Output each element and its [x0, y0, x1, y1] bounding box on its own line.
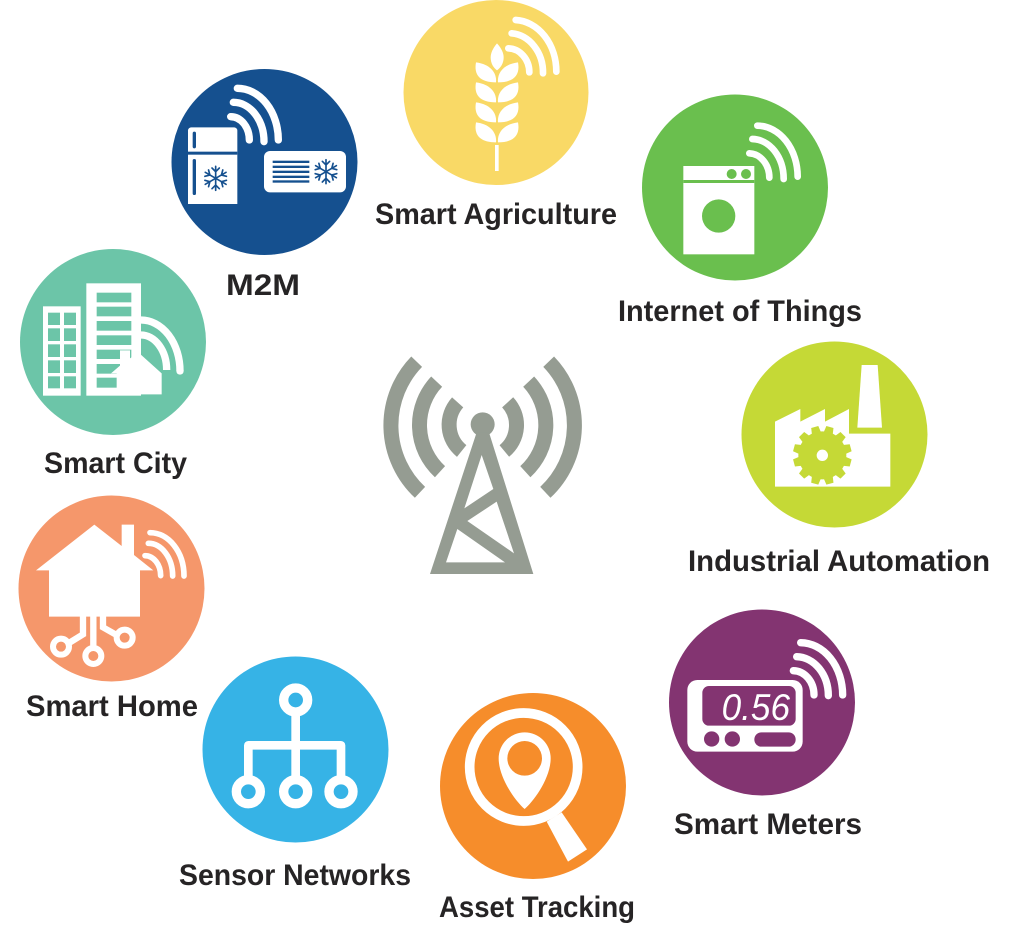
icon: central antenna tower	[391, 362, 574, 574]
panel: Smart Meters	[669, 610, 862, 841]
panel: Smart City	[20, 249, 206, 480]
panel: M2M	[172, 69, 358, 302]
icon: digital meter with wifi	[687, 643, 843, 752]
label: Industrial Automation	[688, 545, 990, 578]
panel: Internet of Things	[618, 94, 862, 328]
label: M2M	[226, 269, 300, 302]
label: Internet of Things	[618, 295, 862, 328]
panel: Smart Agriculture	[375, 0, 617, 231]
label: Smart Meters	[674, 808, 862, 841]
panel: Smart Home	[18, 496, 204, 723]
label: Sensor Networks	[179, 859, 411, 892]
label: Smart Agriculture	[375, 198, 617, 231]
label: Smart Home	[26, 690, 198, 723]
panel: Sensor Networks	[179, 656, 411, 892]
icon: digital meter with wifi: 0.56	[722, 686, 790, 728]
panel: Asset Tracking	[439, 693, 635, 924]
label: Smart City	[44, 447, 188, 480]
icon: washing machine with wifi	[683, 126, 798, 254]
icon: house with circuit and wifi	[36, 525, 184, 664]
label: Asset Tracking	[439, 891, 635, 924]
panel: Industrial Automation	[688, 342, 990, 578]
icon: fridge and air conditioner with wifi	[188, 88, 346, 204]
icon: factory with gear	[775, 365, 890, 487]
icon: network tree	[236, 688, 353, 804]
icon: city buildings with wifi	[43, 283, 184, 396]
icon: magnifier with location pin	[470, 713, 587, 862]
icon: wheat with wifi	[476, 20, 556, 171]
